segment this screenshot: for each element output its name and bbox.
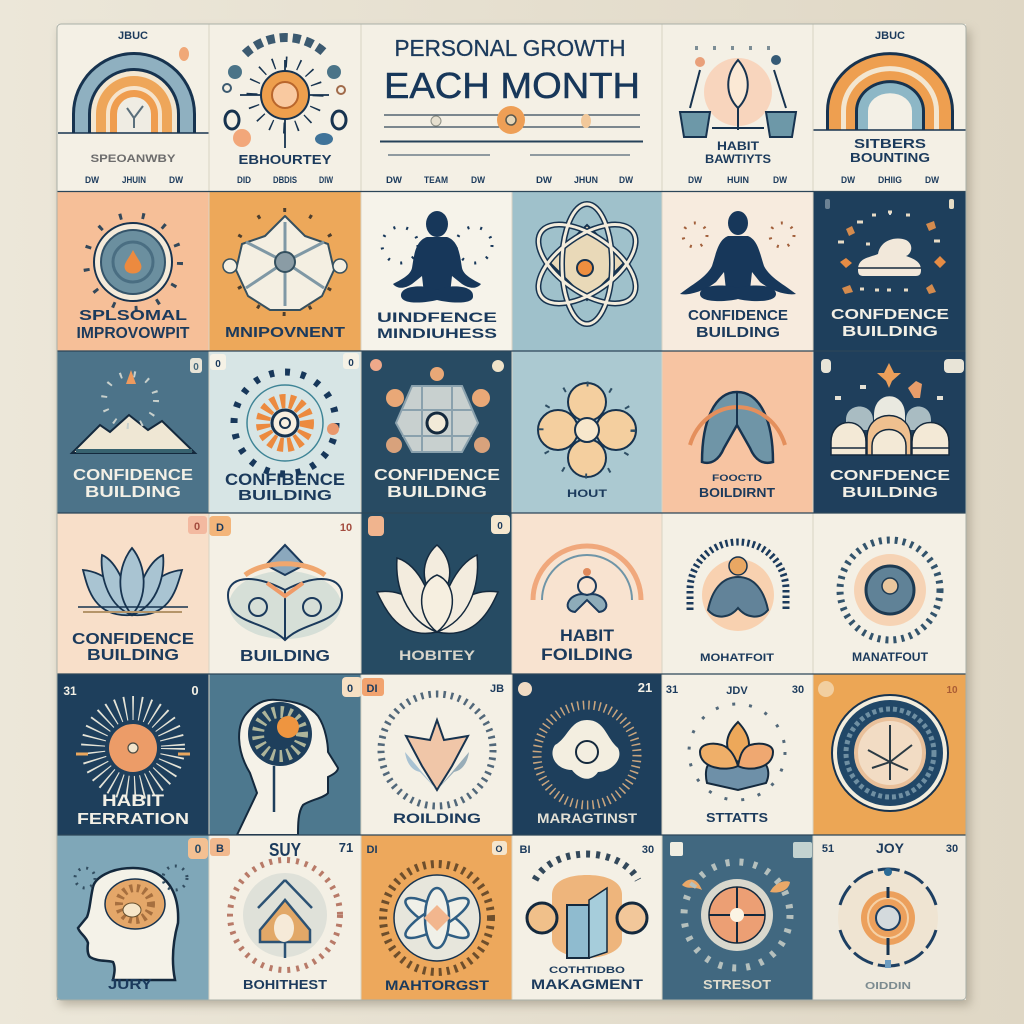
icon: flower in ring xyxy=(381,694,493,806)
label: MOHATFOIT xyxy=(700,652,774,664)
panel: mindfulness, cream xyxy=(361,191,512,351)
panel: target, cream: OIDDIN xyxy=(865,981,911,992)
icon: figure with plant pots xyxy=(680,48,796,137)
panel: head with brain, slate xyxy=(209,674,362,835)
label: JBUC xyxy=(118,30,148,42)
heading: personal growth: PERSONAL GROWTH xyxy=(394,35,626,61)
panel: habit, pale peach: FOILDING xyxy=(541,645,633,664)
day labels xyxy=(386,175,633,185)
panel: management, cream xyxy=(813,513,966,674)
panel: strength, cream xyxy=(662,674,813,835)
label: CONFDENCE xyxy=(831,306,949,323)
badge: 0 xyxy=(194,521,200,533)
panel: confidence domes, navy: BUILDING xyxy=(842,484,938,501)
label: BUILDING xyxy=(240,648,330,665)
badge: 10 xyxy=(340,522,352,534)
day labels: JHUN xyxy=(574,175,598,185)
icon: head silhouette xyxy=(237,700,338,835)
badge: 0 xyxy=(195,842,202,856)
panel: row 1 column 1, rainbow: JHUIN xyxy=(122,175,146,185)
panel: meditation confidence, pale xyxy=(662,191,813,351)
icon: orange sun with rays xyxy=(76,708,190,788)
label: EBHOURTEY xyxy=(238,152,332,167)
label: COTHTIDBO xyxy=(549,965,625,975)
panel: management, navy xyxy=(512,674,662,835)
icon: four petal flower xyxy=(538,383,636,477)
label: HOBITEY xyxy=(399,647,476,663)
icon: cloud with sparks xyxy=(838,212,946,294)
badge: O xyxy=(495,844,503,854)
label: JBUC xyxy=(875,30,905,42)
panel: confidence lotus, pale peach: BUILDING xyxy=(87,647,179,664)
badge xyxy=(342,677,362,697)
panel: row 1 column 6, rainbow: SITBERS xyxy=(854,136,926,151)
panel: cloud, navy xyxy=(813,191,966,351)
panel: southeast, cream xyxy=(209,835,361,1000)
panel: confidence mountains, slate: BUILDING xyxy=(85,484,181,501)
icon: meditating figure xyxy=(382,211,492,303)
icon: sun in ring xyxy=(234,372,339,474)
panel: row 1 column 1, rainbow: DW xyxy=(85,175,99,185)
panel: row 1 column 5, habit plants: DW xyxy=(773,175,787,185)
label: STRESOT xyxy=(703,977,771,992)
icon: blob in ring xyxy=(537,705,637,805)
badge xyxy=(366,841,507,856)
icon: orange target xyxy=(682,862,790,968)
icon: blue panels under arch xyxy=(527,854,647,958)
label: JOY xyxy=(876,840,905,856)
icon: white lotus xyxy=(377,545,498,633)
label: CONFIBENCE xyxy=(225,470,345,489)
label: HABIT xyxy=(717,139,760,153)
icon: house in ring xyxy=(230,860,340,970)
label: FOOCTD xyxy=(712,473,763,483)
label: ROILDING xyxy=(393,810,481,826)
badge: 0 xyxy=(191,683,199,698)
label: SPLSOMAL xyxy=(79,307,187,324)
panel: row 1 column 1, rainbow: DW xyxy=(169,175,183,185)
grid lines xyxy=(209,24,813,1000)
icon: orange petals with blue base xyxy=(689,704,785,800)
badge xyxy=(210,838,353,856)
badge: 0 xyxy=(497,521,503,532)
panel: cloud, navy: BUILDING xyxy=(842,323,938,340)
icon: meditating figure, wide arms xyxy=(680,211,796,301)
panel: management, cream: MAKAGMENT xyxy=(531,976,644,992)
panel: confidence lotus, pale peach xyxy=(57,513,209,674)
badge: BI xyxy=(520,844,530,856)
panel: confidence mountains, slate xyxy=(57,351,209,513)
panel: row 1 column 6, rainbow: DW xyxy=(925,175,939,185)
panel: arch, peach: BOILDIRNT xyxy=(699,485,775,500)
badge: DI xyxy=(366,844,378,856)
icon: hexagon brain xyxy=(370,359,504,453)
label: MANATFOUT xyxy=(852,650,929,664)
badge: JDV xyxy=(726,685,748,697)
label: JURY xyxy=(108,976,152,993)
panel: personal improvement, peach xyxy=(57,191,209,351)
panel: confidence hexagon, navy: BUILDING xyxy=(387,484,487,501)
label: MAHTORGST xyxy=(385,977,490,993)
panel: row 1 column 2, sun: DID xyxy=(237,175,251,185)
badge: 10 xyxy=(946,685,958,696)
timeline with orange marker xyxy=(380,106,643,155)
panel: row 1 column 2, sun: DBDIS xyxy=(273,175,297,185)
label: SUY xyxy=(269,840,301,860)
panel: southeast, cream: BOHITHEST xyxy=(243,977,327,992)
badge: D xyxy=(216,522,224,534)
panel: atom, light blue xyxy=(512,191,662,351)
icon: sun with ring of symbols xyxy=(223,38,346,148)
badge xyxy=(670,842,812,858)
icon: orange rainbow arch xyxy=(813,52,966,130)
icon: rainbow arch xyxy=(58,47,209,133)
badge: 30 xyxy=(642,844,654,856)
panel: row 1 column 1, rainbow xyxy=(57,24,209,191)
badge: 71 xyxy=(339,840,353,855)
icon: ornamental plant xyxy=(228,545,342,640)
icon: blue arch xyxy=(690,392,785,463)
label: CONFIDENCE xyxy=(688,307,788,324)
panel: building, cream xyxy=(209,513,361,674)
panel: building, cream xyxy=(361,674,512,835)
panel: target, cream: 51 xyxy=(822,843,834,855)
badge xyxy=(188,838,208,859)
label: MARAGTINST xyxy=(537,810,637,826)
day labels: DW xyxy=(619,175,633,185)
panel: personal improvement, peach: IMPROVOWPIT xyxy=(76,325,190,342)
label: STTATTS xyxy=(706,810,768,825)
label: CONFIDENCE xyxy=(73,467,193,484)
icon: blue lotus xyxy=(78,548,188,615)
label: CONFIDENCE xyxy=(374,467,500,484)
badge xyxy=(209,516,352,536)
label: MNIPOVNENT xyxy=(225,324,345,341)
label: HOUT xyxy=(567,488,607,500)
badge xyxy=(520,844,654,856)
icon: concentric compass xyxy=(838,868,938,968)
panel: confidence hexagon, navy xyxy=(361,351,512,513)
badge: 31 xyxy=(666,684,678,696)
panel: white lotus, navy xyxy=(361,513,512,674)
day labels: TEAM xyxy=(424,175,448,185)
panel: meditation confidence, pale: BUILDING xyxy=(696,324,780,341)
label: HABIT xyxy=(102,791,165,810)
icon: atom xyxy=(525,204,649,324)
panel: row 1 column 6, rainbow: BOUNTING xyxy=(850,150,930,165)
day labels: DW xyxy=(386,175,403,185)
icon: dotted ring with disc xyxy=(840,540,940,640)
badge: 0 xyxy=(215,359,221,370)
badge: 21 xyxy=(638,680,652,695)
badge: 31 xyxy=(63,684,77,698)
panel: strategy, slate xyxy=(662,835,813,1000)
badge: B xyxy=(216,843,224,855)
badge: DI xyxy=(366,683,378,695)
panel: row 1 column 1, rainbow: SPEOANWBY xyxy=(90,153,176,165)
panel: jury head, blue xyxy=(57,835,209,1000)
icon: figure in circle xyxy=(690,542,786,631)
badge xyxy=(362,678,504,696)
panel: row 1 column 2, sun: DIW xyxy=(319,175,333,185)
day labels: DW xyxy=(471,175,485,185)
panel: improvement, orange xyxy=(209,191,361,351)
icon: white flower xyxy=(223,210,347,314)
badge: 0 xyxy=(193,362,199,373)
panel: title header xyxy=(361,24,662,191)
icon: maze disc with flame xyxy=(86,215,180,309)
heading: each month: EACH MONTH xyxy=(384,65,640,106)
panel: orange seal xyxy=(813,674,966,835)
panel: row 1 column 5, habit plants: BAWTIYTS xyxy=(705,152,771,166)
label: UINDFENCE xyxy=(377,309,497,325)
badge xyxy=(63,683,199,698)
panel: confidence domes, navy xyxy=(813,351,966,513)
panel: target, cream xyxy=(813,835,966,1000)
badge: 0 xyxy=(348,358,354,369)
icon: circular seal xyxy=(832,695,948,811)
badge: 0 xyxy=(347,683,353,695)
icon: arch with figure xyxy=(533,546,641,612)
panel: moderator, cream xyxy=(662,513,813,674)
icon: flower in circle xyxy=(383,864,491,972)
label: HABIT xyxy=(560,626,615,645)
badge xyxy=(188,516,207,534)
panel: management, cream xyxy=(512,835,662,1000)
day labels: DW xyxy=(536,175,553,185)
panel: row 1 column 6, rainbow: DW xyxy=(841,175,855,185)
label: CONFIDENCE xyxy=(72,631,194,648)
panel: mindfulness, cream: MINDIUHESS xyxy=(377,325,497,341)
icon: domes xyxy=(821,359,964,455)
panel: habit formation, navy: FERRATION xyxy=(77,811,189,828)
badge xyxy=(666,684,804,697)
panel: row 1 column 2, sun xyxy=(209,24,361,191)
panel: habit formation, navy xyxy=(57,674,209,835)
panel: four petal flower, light blue xyxy=(512,351,662,513)
panel: arch, peach xyxy=(662,351,813,513)
badge xyxy=(518,680,652,696)
panel: confidence sun, pale blue xyxy=(209,351,361,513)
icon: mountains xyxy=(72,370,195,453)
icon: head facing left xyxy=(75,866,187,980)
panel: manifest, orange xyxy=(361,835,512,1000)
label: CONFDENCE xyxy=(830,467,950,484)
panel: row 1 column 6, rainbow: DHIIG xyxy=(878,175,902,185)
panel: row 1 column 5, habit plants xyxy=(662,24,813,191)
panel: row 1 column 5, habit plants: DW xyxy=(688,175,702,185)
panel: row 1 column 5, habit plants: HUIN xyxy=(727,175,749,185)
panel: habit, pale peach xyxy=(512,513,662,674)
panel: confidence sun, pale blue: BUILDING xyxy=(238,487,332,504)
badge xyxy=(368,515,510,536)
badge: JB xyxy=(490,683,504,695)
panel: row 1 column 6, rainbow xyxy=(813,24,966,191)
badge xyxy=(210,353,359,370)
badges xyxy=(825,199,954,209)
badge xyxy=(190,358,202,373)
badge xyxy=(818,681,958,697)
badge: 30 xyxy=(792,684,804,696)
panel: target, cream: 30 xyxy=(946,843,958,855)
